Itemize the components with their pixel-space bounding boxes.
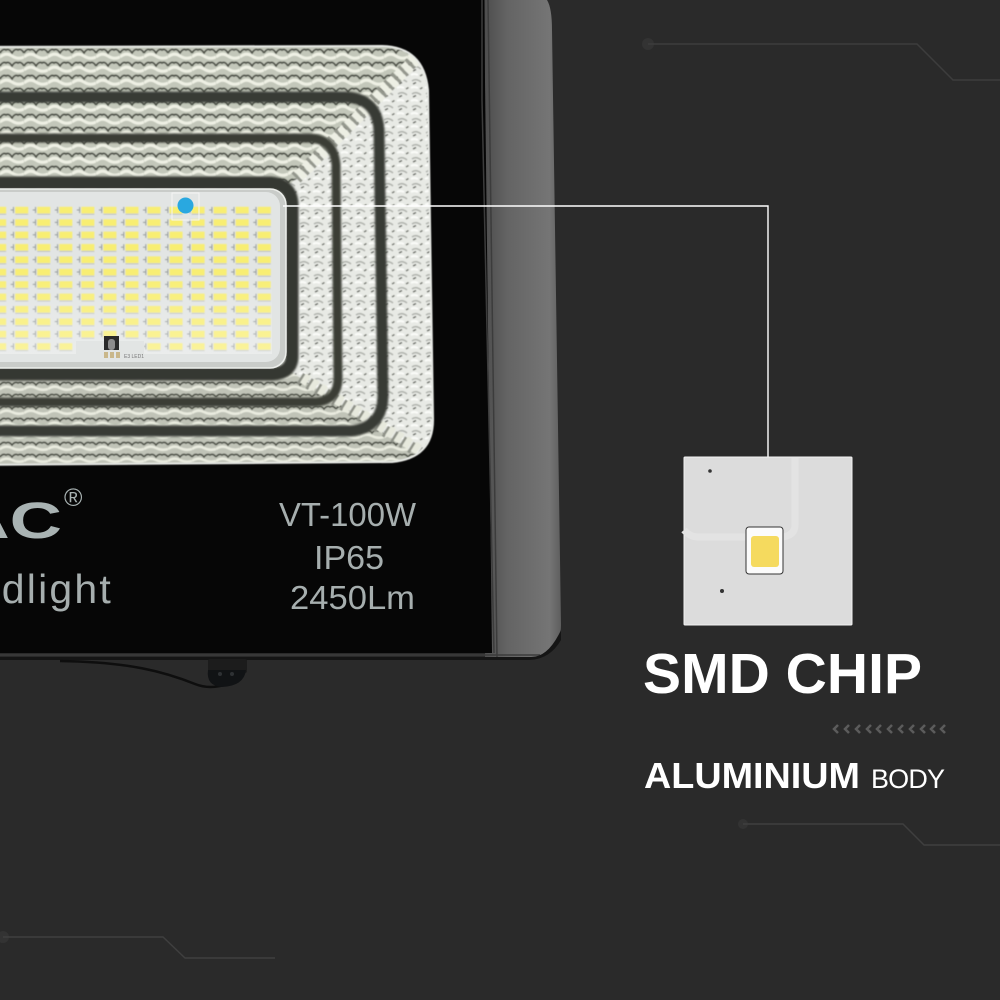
sensor component bbox=[104, 336, 120, 358]
circuit line: lower right bbox=[738, 819, 1000, 845]
dark ring 3 bbox=[0, 183, 292, 374]
LED matrix lower whitening bbox=[0, 270, 272, 354]
heading: SMD CHIP: SMD CHIP bbox=[643, 642, 922, 706]
upper corner ridge highlights bbox=[299, 55, 420, 176]
subheading: ALUMINIUM BODY: ALUMINIUM bbox=[644, 755, 860, 796]
registered mark: ® bbox=[64, 484, 83, 512]
callout connector line bbox=[283, 206, 768, 457]
reflector right facets bbox=[284, 65, 432, 453]
upper corner ridges bbox=[296, 56, 418, 178]
board marking: E3 LED1 bbox=[124, 354, 144, 360]
reflector bbox=[0, 40, 440, 470]
PCB traces bbox=[684, 458, 795, 537]
model specs: 2450Lm bbox=[290, 579, 415, 616]
callout marker bbox=[172, 193, 199, 220]
V-TAC logo bbox=[0, 484, 83, 549]
SMD LED chip bbox=[746, 527, 783, 574]
dark ring 2 bbox=[0, 138, 338, 402]
floodlight body bbox=[0, 0, 561, 687]
body lower shadow edge bbox=[0, 630, 561, 660]
model specs: IP65 bbox=[314, 539, 384, 576]
subheading: ALUMINIUM BODY bbox=[644, 755, 945, 796]
dark ring 1 bbox=[0, 97, 383, 431]
dark rings bbox=[0, 97, 383, 431]
reflector bottom facets bbox=[0, 374, 416, 464]
SMD chip close-up panel bbox=[684, 457, 852, 625]
body side frame bbox=[485, 0, 561, 658]
lower corner ridges bbox=[300, 378, 425, 456]
cable and connector bbox=[60, 659, 247, 687]
LED matrix bbox=[0, 204, 272, 353]
subheading: ALUMINIUM BODY: BODY bbox=[871, 764, 945, 794]
via holes bbox=[708, 469, 712, 473]
panel edge highlights bbox=[0, 0, 540, 657]
chevron divider bbox=[834, 725, 945, 733]
lower corner ridge highlights bbox=[303, 378, 426, 454]
circuit line: top right bbox=[642, 38, 1000, 80]
model specs: VT-100W bbox=[279, 496, 417, 533]
black front panel bbox=[0, 0, 492, 653]
reflector outer rim bbox=[0, 46, 433, 465]
model specs bbox=[279, 496, 417, 616]
circuit line: bottom left bbox=[0, 931, 275, 958]
reflector top facets bbox=[0, 47, 414, 184]
board gap around sensor bbox=[76, 341, 144, 354]
LED circuit board bbox=[0, 189, 286, 368]
